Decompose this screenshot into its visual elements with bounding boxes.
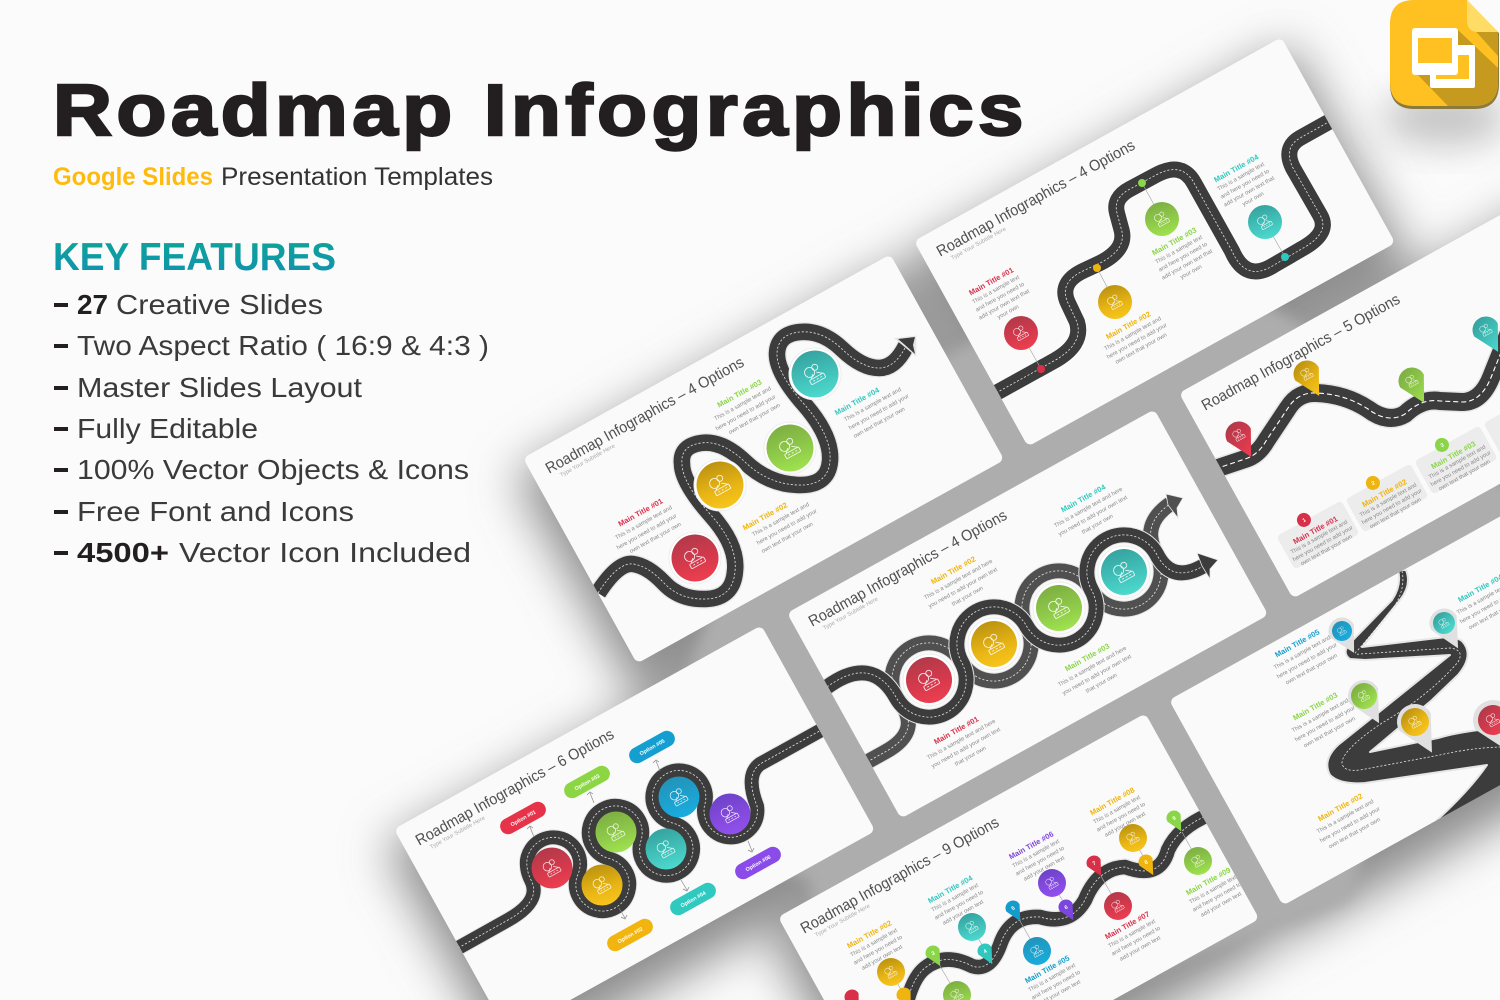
text block 02: own text that your own (761, 522, 814, 555)
text block 03: and here you need to (1158, 242, 1209, 274)
text block 02: This is a sample text and here (923, 559, 994, 601)
step circle purple (710, 794, 750, 834)
pointer arrows (527, 760, 754, 919)
slide title: Type Your Subtitle Here (814, 903, 871, 939)
option pill 04 (667, 880, 719, 918)
numbered pins (842, 808, 1188, 1000)
text block 02: Main Title #02 (845, 918, 893, 950)
text block 01: that your own (954, 746, 987, 768)
text block 04: This is a sample text and here (1053, 487, 1124, 529)
text block 01: your own (997, 304, 1020, 321)
text block 02: and here you need to (853, 935, 904, 967)
key features list (54, 289, 489, 568)
slide title: Type Your Subtitle Here (559, 443, 616, 479)
subtitle: Google Slides (53, 163, 213, 191)
text block 07 (1101, 908, 1166, 965)
text block 03: you need to add your own text (1062, 654, 1133, 697)
text block 04: and here you need to (1220, 169, 1271, 201)
text block 02: Main Title #02 (1104, 309, 1152, 341)
text block 02 (1104, 312, 1167, 364)
text block 04: you need to add your own text (1058, 495, 1129, 538)
text block 05 (1021, 952, 1086, 1000)
text block 02 (742, 502, 816, 553)
text block 03: This is a sample text (1155, 235, 1204, 266)
text block 03: own text that your own (1303, 716, 1357, 749)
step circle yellow (1098, 285, 1132, 319)
text block 09: and here you need to (1192, 882, 1243, 914)
text block 01: Main Title #01 (932, 714, 981, 746)
text block 03 (1152, 228, 1213, 280)
text block 03: Main Title #03 (1291, 690, 1339, 722)
card 02: 2 (1371, 480, 1376, 487)
text block 02: Main Title #02 (1316, 791, 1364, 823)
upper woven road with arrow (827, 535, 1218, 717)
text block 08 (1086, 784, 1151, 841)
connector lines (891, 832, 1198, 995)
panel: slide 6 options (394, 625, 875, 1000)
text block 03: here you need to add your (1294, 705, 1356, 743)
step circle teal (789, 348, 841, 400)
key features list: 100% Vector Objects & Icons (77, 454, 469, 485)
text block 03 (714, 380, 780, 434)
step circle yellow (968, 618, 1020, 670)
step circle green (1145, 202, 1179, 236)
text block 04: and here you need to (934, 890, 985, 922)
card 04 (1483, 387, 1500, 457)
text block 04: your own (1242, 191, 1265, 208)
pin teal (1424, 603, 1471, 655)
lower woven road with arrow (867, 494, 1183, 762)
text block 04: own text that your own (853, 407, 906, 440)
card 03: own text that your own (1438, 459, 1492, 492)
pin blue (1324, 613, 1366, 659)
pin teal (1468, 312, 1500, 358)
text block 06: This is a sample text (1012, 839, 1061, 870)
text block 01: add your own text that (978, 288, 1031, 322)
pin yellow (1289, 356, 1331, 402)
pin red (1221, 417, 1263, 463)
text block 05: own text that your own (1285, 653, 1339, 686)
road (905, 815, 1208, 1000)
text block 04: that your own (1081, 514, 1114, 536)
text block 01: own text that your own (629, 522, 683, 555)
text block 05: Main Title #05 (1273, 627, 1322, 659)
text block 09: This is a sample text (1189, 875, 1238, 906)
text block 08: add your own text (1104, 811, 1147, 839)
text block 01 (968, 268, 1030, 320)
text block 04: here you need to add your (848, 393, 910, 432)
key features list: Creative Slides (116, 289, 323, 320)
step circle red (1004, 316, 1038, 350)
text block 01 (614, 498, 682, 553)
text block 02: This is a sample text (850, 928, 899, 959)
road (996, 119, 1334, 393)
gap fill between slides (634, 241, 1500, 1000)
text block 03: This is a sample text and here (1057, 646, 1128, 688)
text block 05 (1265, 623, 1343, 689)
text block 04: Main Title #04 (1212, 152, 1261, 184)
text block 02: This is a sample text and (1104, 316, 1163, 352)
numbered pins: 9 (1172, 816, 1177, 822)
text block 06: and here you need to (1015, 846, 1066, 878)
pin red (1466, 693, 1500, 763)
panel: slide 4 options winding with arrow (523, 254, 1004, 664)
text block 01: This is a sample text and here (926, 719, 997, 761)
option pill 02: Option #02 (617, 926, 644, 945)
key features list: Master Slides Layout (77, 372, 362, 403)
card 02 (1342, 456, 1430, 534)
option pill 03: Option #03 (574, 773, 601, 792)
card 03: This is a sample text and (1428, 444, 1487, 481)
icon: Google Slides (1383, 0, 1500, 146)
option pill 05 (626, 728, 678, 766)
card 02: This is a sample text and (1359, 482, 1418, 519)
card 03: Main Title #03 (1429, 439, 1477, 471)
text block 08: Main Title #08 (1088, 785, 1136, 817)
pin green (1394, 363, 1436, 409)
text block 01: This is a sample text (972, 275, 1021, 306)
text block 04: add your own text that (1223, 175, 1276, 209)
card 03 (1411, 418, 1499, 496)
numbered pins: 8 (1144, 860, 1149, 866)
road with arrow (598, 332, 915, 599)
text block 04: This is a sample text and (843, 387, 902, 423)
background shadow behind slides (399, 59, 1500, 1000)
panel: slide 4 options squared road (914, 37, 1395, 447)
key features list: Vector Icon Included (179, 537, 471, 568)
step circle blue (658, 776, 700, 818)
text block 02 (1308, 787, 1386, 853)
key features list: 27 (77, 289, 108, 320)
text block 03 (1283, 686, 1361, 752)
slide title: Roadmap Infographics – 9 Options (798, 814, 1002, 937)
card 02: here you need to add your (1361, 488, 1423, 526)
text block 03: own text that your own (728, 403, 782, 436)
text block 04: This is a sample text (1217, 162, 1266, 193)
slide title: Type Your Subtitle Here (822, 596, 879, 632)
numbered pins: 7 (1092, 861, 1097, 867)
card 01 (1273, 493, 1361, 571)
text block 08: and here you need to (1096, 802, 1147, 834)
pin green (1342, 674, 1393, 731)
text block 02: This is a sample text and (1316, 799, 1375, 835)
text block 02: add your own text (861, 944, 904, 972)
slide title: Roadmap Infographics – 4 Options (806, 507, 1010, 630)
text block 03: add your own text that (1161, 248, 1214, 282)
text block 01: and here you need to (975, 282, 1026, 314)
text block 01: This is a sample text and (614, 505, 673, 541)
text block 02: that your own (951, 586, 984, 608)
text block 04 (924, 872, 989, 929)
text block 03: your own (1180, 264, 1203, 281)
text block 02: This is a sample text and (751, 502, 810, 538)
key features list: Fully Editable (77, 413, 258, 444)
step circle teal (646, 828, 686, 870)
text block 09 (1182, 864, 1247, 921)
slide title: Roadmap Infographics – 6 Options (413, 726, 617, 849)
card 01: own text that your own (1300, 534, 1354, 567)
road (1215, 330, 1500, 469)
text block 04 (834, 387, 908, 438)
slide title: Roadmap Infographics – 4 Options (934, 137, 1138, 260)
text block 02: Main Title #02 (741, 500, 789, 532)
key features list: Free Font and Icons (77, 496, 354, 527)
step circle yellow (694, 459, 746, 511)
option pill 03 (561, 763, 613, 801)
step circle green (1033, 582, 1085, 634)
text block 03: Main Title #03 (716, 378, 763, 409)
step circle green (596, 812, 636, 852)
text block 09: Main Title #09 (1184, 865, 1232, 897)
card 03: 3 (1440, 442, 1445, 449)
text block 05: here you need to add your (1276, 642, 1338, 680)
text block 02: own text that your own (1115, 332, 1168, 366)
text block 04: This is a sample text (931, 883, 980, 914)
main title: Roadmap Infographics (53, 71, 1028, 151)
text block 03: This is a sample text and (713, 386, 772, 422)
panel: slide 9 options (778, 713, 1259, 1000)
card 02: Main Title #02 (1360, 477, 1408, 509)
text block 09: add your own text (1200, 891, 1243, 919)
text block 01: here you need to add your (616, 513, 678, 551)
slide title: Type Your Subtitle Here (950, 226, 1007, 262)
text block 06: add your own text (1023, 855, 1066, 883)
winding perspective road (1327, 570, 1500, 822)
card 03: here you need to add your (1430, 450, 1492, 488)
option pill 04: Option #04 (680, 890, 707, 909)
step circle teal (1098, 546, 1150, 598)
text block 04 (1214, 154, 1275, 207)
step circle red (903, 654, 955, 706)
text block 03: that your own (1085, 673, 1118, 695)
text block 07: Main Title #07 (1103, 909, 1151, 941)
text block 03: This is a sample text and (1291, 698, 1350, 734)
road (458, 728, 825, 948)
card 02: own text that your own (1369, 497, 1423, 530)
text block 05: This is a sample text and (1273, 635, 1332, 671)
step circle yellow (582, 864, 622, 906)
numbered pins: 5 (1011, 906, 1016, 912)
step circle green (764, 422, 816, 474)
icon circles (877, 824, 1212, 1000)
option pill 01 (497, 799, 549, 837)
text block 04: Main Title #04 (926, 873, 975, 905)
text block 07: and here you need to (1111, 926, 1162, 958)
text block 05: Main Title #05 (1023, 953, 1072, 985)
panel: slide perspective road (1169, 496, 1500, 906)
step circle red (532, 848, 572, 888)
text block 01: Main Title #01 (967, 265, 1016, 297)
text block 04: Main Title #04 (833, 385, 882, 417)
card 01: here you need to add your (1292, 525, 1354, 563)
option pill 05: Option #05 (639, 738, 666, 757)
text block 05: This is a sample text (1028, 963, 1077, 994)
text block 03: Main Title #03 (1150, 225, 1198, 257)
pin yellow (1391, 698, 1448, 761)
numbered pins: 6 (1064, 905, 1069, 911)
slide title: Type Your Subtitle Here (429, 815, 486, 851)
card 01: This is a sample text and (1290, 519, 1349, 556)
option pill 01: Option #01 (510, 809, 537, 828)
connectors and road dots (1021, 179, 1289, 373)
text block 06 (1005, 828, 1070, 885)
option pill 02 (604, 916, 656, 954)
panel: slide 5 options (1179, 189, 1500, 599)
key features list: 4500+ (77, 537, 169, 568)
numbered pins: 4 (983, 949, 988, 955)
text block 03: here you need to add your (715, 394, 777, 432)
key features heading: KEY FEATURES (53, 236, 336, 279)
text block 02: Main Title #02 (929, 554, 977, 586)
text block 04: add your own text (942, 899, 985, 927)
option pill 06 (732, 844, 784, 882)
numbered pins: 3 (931, 951, 936, 957)
text block 07: This is a sample text (1108, 919, 1157, 950)
text block 08: This is a sample text (1093, 795, 1142, 826)
subtitle (53, 163, 493, 191)
card 01: 1 (1302, 517, 1307, 524)
option pill 06: Option #06 (745, 854, 772, 873)
text block 04: Main Title #04 (1059, 482, 1108, 514)
text block 01: you need to add your own text (931, 727, 1002, 770)
step circle red (669, 532, 721, 584)
text block 02: you need to add your own text (928, 567, 999, 610)
card 01: Main Title #01 (1291, 514, 1340, 546)
text block 04 (1448, 568, 1500, 634)
text block 02 (843, 917, 908, 974)
key features list: Two Aspect Ratio ( 16:9 & 4:3 ) (77, 330, 489, 361)
text block 02: own text that your own (1328, 817, 1382, 850)
text block 07: add your own text (1119, 935, 1162, 963)
text block 02: here you need to add your (1106, 323, 1168, 361)
text block 02: here you need to add your (1319, 806, 1381, 844)
slide title: Roadmap Infographics – 5 Options (1199, 291, 1403, 414)
step circle teal (1248, 205, 1282, 239)
subtitle: Presentation Templates (221, 163, 493, 191)
text block 03: Main Title #03 (1063, 641, 1111, 673)
text block 01: Main Title #01 (617, 496, 665, 528)
text block 06: Main Title #06 (1007, 829, 1055, 861)
text block 02: here you need to add your (756, 508, 818, 547)
panel: slide 4 options woven road (787, 409, 1268, 819)
slide title: Roadmap Infographics – 4 Options (543, 354, 747, 477)
